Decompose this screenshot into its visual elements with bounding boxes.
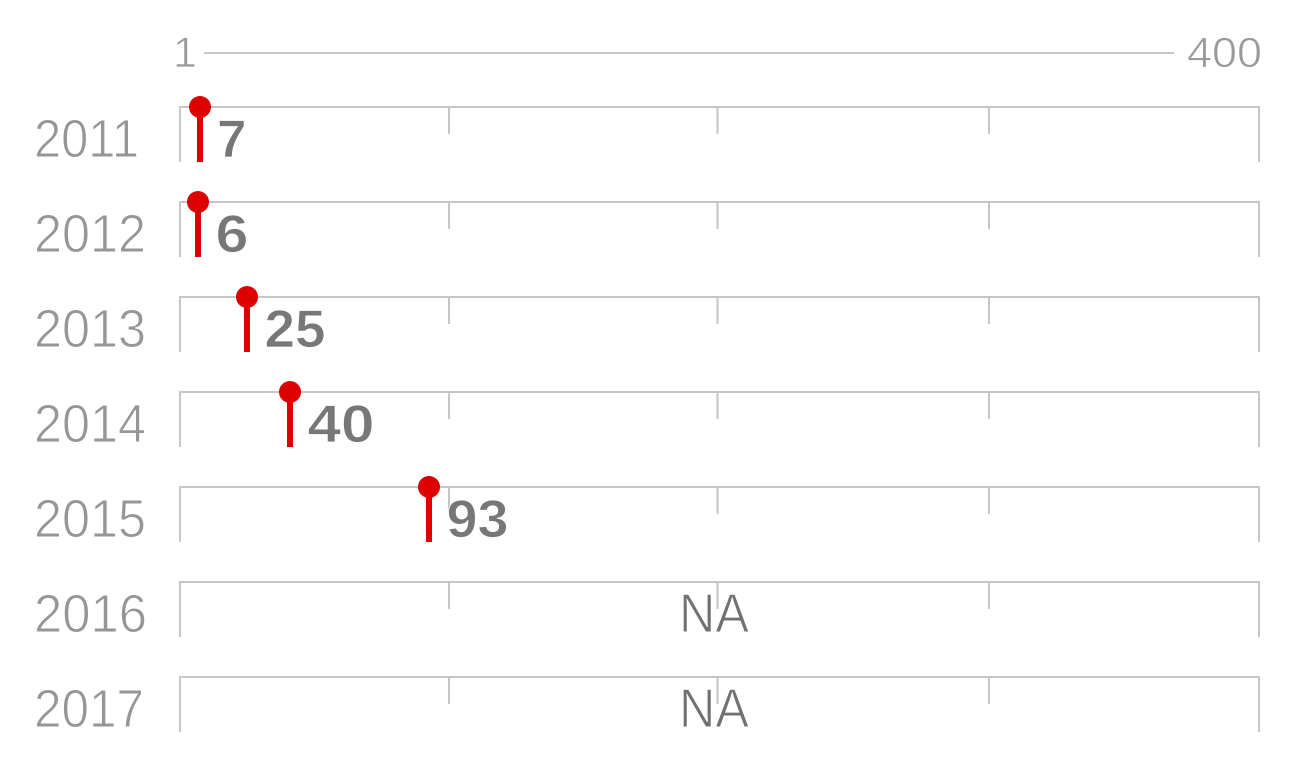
scale axis: 400 — [1187, 29, 1262, 77]
row: 2016: NA — [679, 582, 749, 644]
row: 2015: 2015 — [34, 489, 146, 549]
row: 2016 — [34, 582, 1259, 644]
scale axis — [173, 29, 1262, 77]
row: 2011: 7 — [217, 110, 246, 169]
row: 2013 — [34, 286, 1259, 359]
row: 2012: 6 — [216, 205, 248, 264]
row: 2017: 2017 — [34, 679, 144, 739]
row: 2016: 2016 — [34, 584, 147, 644]
row: 2013: 25 — [264, 300, 326, 359]
row: 2013: 2013 — [34, 299, 146, 359]
row: 2011 — [34, 96, 1259, 169]
row: 2014: 40 — [308, 395, 374, 454]
row: 2014: 2014 — [34, 394, 146, 454]
scale axis: 1 — [173, 29, 197, 77]
row: 2011: 2011 — [34, 109, 139, 169]
row: 2012: 2012 — [34, 204, 146, 264]
row: 2014 — [34, 381, 1259, 454]
row: 2015 — [34, 476, 1259, 549]
row: 2012 — [34, 191, 1259, 264]
row: 2017: NA — [679, 677, 749, 739]
row: 2017 — [34, 677, 1259, 739]
row: 2015: 93 — [446, 490, 508, 549]
